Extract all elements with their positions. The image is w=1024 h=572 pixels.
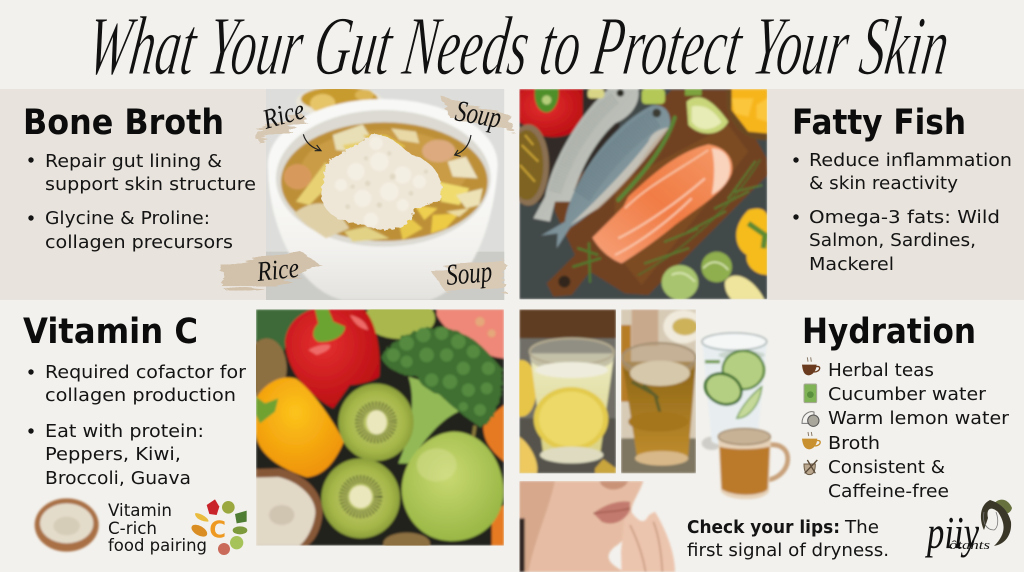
list: hydration items: Consistent &	[828, 457, 945, 478]
logo: priy otahts: ôtahts	[949, 537, 990, 552]
text: vitamin c benefits	[28, 362, 247, 489]
photo: fatty fish platter	[508, 89, 768, 300]
list: hydration items: Herbal teas	[828, 360, 934, 381]
fingers	[621, 512, 675, 572]
text: bone broth benefits: collagen precursors	[45, 232, 233, 253]
label: soup bottom: Soup	[445, 255, 493, 292]
flour bowl	[256, 468, 323, 546]
whole kiwi	[256, 337, 288, 397]
lemon wedge	[725, 276, 764, 299]
text: vitamin c benefits: Eat with protein:	[45, 421, 204, 442]
label: rice top: Rice	[259, 94, 308, 136]
yellow pepper	[736, 208, 767, 275]
text: fatty fish benefits: Mackerel	[809, 254, 894, 275]
yellow pepper	[256, 378, 344, 477]
text: vitamin c-rich food pairing	[108, 501, 207, 555]
logo: priy otahts: piiy	[925, 507, 979, 558]
callout: check your lips: first signal of dryness.	[687, 540, 889, 561]
text: bone broth benefits	[28, 151, 256, 253]
lime	[588, 89, 728, 133]
guava	[402, 426, 503, 541]
label: rice bottom: Rice	[255, 253, 301, 288]
front fish	[541, 105, 670, 248]
broccoli	[382, 327, 502, 463]
list: hydration items: Warm lemon water	[828, 408, 1010, 429]
panel: vitamin c text	[23, 312, 247, 489]
spinach	[256, 309, 313, 352]
cutting board	[547, 90, 768, 297]
text: bone broth benefits: Glycine & Proline:	[45, 208, 210, 229]
callout: check your lips: Check your lips:	[687, 517, 840, 538]
photo: mug of broth	[718, 429, 788, 499]
salmon	[592, 144, 732, 263]
green fruit	[364, 309, 437, 341]
callout: check your lips	[687, 517, 889, 561]
text: vitamin c benefits: Broccoli, Guava	[45, 468, 191, 489]
text: vitamin c benefits: Peppers, Kiwi,	[45, 444, 181, 465]
photo: herbal tea	[621, 309, 703, 473]
text: fatty fish benefits: Reduce inflammation	[809, 150, 1012, 171]
kiwi slice upper	[338, 384, 414, 461]
label: rice top	[256, 94, 308, 142]
text: bone broth benefits: support skin structure	[45, 174, 256, 195]
photo: warm lemon water	[519, 309, 616, 474]
panel: fatty fish	[768, 89, 1024, 300]
red pepper	[285, 309, 380, 408]
text: vitamin c-rich food pairing: C-rich	[108, 519, 157, 538]
icon: broth cup	[802, 432, 820, 449]
label: rice bottom	[222, 251, 322, 290]
vegetables	[284, 124, 483, 242]
back fish	[533, 89, 639, 222]
arrow: rice	[303, 134, 321, 151]
photo: rice soup bowl	[266, 86, 504, 302]
arrow: soup	[455, 135, 471, 156]
icon: vitamin c food wreath: C	[209, 517, 226, 543]
brussels sprouts	[662, 252, 732, 300]
text: vitamin c-rich food pairing: food pairing	[108, 536, 207, 555]
list: hydration items: Caffeine-free	[828, 481, 949, 502]
icon: no caffeine	[804, 460, 817, 475]
photo: woman touching lips	[519, 481, 675, 572]
photo: cucumber water	[700, 333, 767, 450]
heading: fatty fish: Fatty Fish	[792, 103, 966, 143]
logo: priy otahts	[925, 500, 1012, 558]
heading: hydration: Hydration	[802, 312, 976, 352]
text: vitamin c benefits: collagen production	[45, 385, 236, 406]
callout: check your lips: The	[844, 517, 879, 538]
icon: flour bowl	[35, 498, 99, 552]
guava slice	[437, 309, 504, 358]
bowl of capsules	[519, 122, 551, 207]
rice mound	[321, 135, 442, 230]
label: soup top: Soup	[453, 94, 504, 135]
text: fatty fish benefits: & skin reactivity	[809, 173, 958, 194]
panel: hydration	[802, 312, 1010, 502]
list: hydration items: Cucumber water	[828, 384, 987, 405]
icon: lemon water	[802, 412, 819, 426]
icon: herbal tea cup	[802, 357, 820, 375]
mango bowl	[727, 89, 767, 140]
orange	[483, 405, 504, 462]
icons: hydration list	[802, 357, 820, 475]
text: fatty fish benefits: Omega-3 fats: Wild	[809, 207, 1000, 228]
text: bone broth benefits: Repair gut lining &	[45, 151, 222, 172]
photo: vitamin c foods	[256, 309, 504, 546]
panel: bone broth	[0, 89, 270, 300]
heading: bone broth: Bone Broth	[23, 103, 224, 143]
icon: leaf and face	[981, 500, 1012, 546]
text: fatty fish benefits: Salmon, Sardines,	[809, 230, 976, 251]
icon: cucumber water	[804, 384, 817, 403]
icon: vitamin c food wreath	[189, 499, 247, 555]
text: fatty fish benefits	[793, 150, 1012, 275]
rosemary	[573, 117, 763, 282]
list: hydration items: Broth	[828, 433, 880, 454]
text: vitamin c benefits: Required cofactor for	[45, 362, 247, 383]
heading: vitamin c: Vitamin C	[23, 312, 198, 352]
red pepper	[519, 89, 583, 137]
list: hydration items	[828, 360, 1010, 502]
text: vitamin c-rich food pairing: Vitamin	[108, 501, 172, 520]
kiwi slice lower	[321, 458, 400, 538]
bottom kiwi	[382, 531, 432, 546]
